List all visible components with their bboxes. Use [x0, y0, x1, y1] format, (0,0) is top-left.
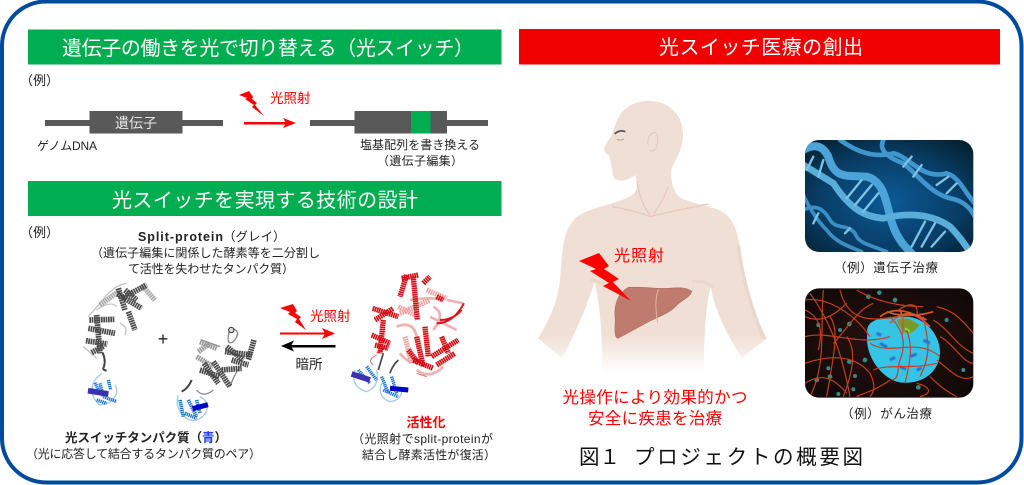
icon: light arrow top [239, 91, 310, 128]
text: activation description [352, 415, 496, 462]
diagram: genome DNA before: ゲノムDNA [37, 139, 97, 153]
protein: blue pair 1 [88, 374, 117, 405]
protein: blue pair in complex [352, 367, 408, 402]
diagram: genome DNA before: 遺伝子 [115, 115, 157, 131]
protein: blue pair 2 [177, 395, 208, 420]
text: activation description: 結合し酵素活性が復活） [362, 447, 496, 462]
caption: gene therapy: （例）遺伝子治療 [834, 260, 938, 275]
label: light irradiation on body: 光照射 [614, 247, 664, 265]
text: light switch protein description: （光に応答して結合するタンパク質のペア） [26, 446, 261, 461]
text: activation description: 活性化 [406, 415, 446, 430]
caption: cancer therapy: （例）がん治療 [841, 406, 932, 421]
heading: technology design [28, 181, 502, 216]
reversible arrows with light and dark labels: 光照射 [310, 309, 350, 324]
liver [615, 287, 692, 338]
reversible arrows with light and dark labels [280, 304, 350, 372]
example label 1: （例） [20, 73, 59, 88]
protein: gray fragment 1 [83, 283, 155, 371]
text: light switch protein description [26, 430, 261, 461]
text: activation description: （光照射でsplit-proteinが [352, 431, 493, 446]
protein: active red complex [371, 275, 464, 377]
text: treatment message [562, 388, 748, 428]
text: treatment message: 光操作により効果的かつ [562, 388, 748, 407]
heading: gene switch: 遺伝子の働きを光で切り替える（光スイッチ） [62, 37, 474, 60]
heading: gene switch [28, 30, 502, 64]
text: split-protein description: （遺伝子編集に関係した酵素等を二分割し [91, 245, 320, 260]
diagram: genome DNA edited [310, 111, 488, 168]
diagram: genome DNA before [37, 111, 223, 153]
body silhouette [538, 101, 767, 373]
text: split-protein description [91, 230, 320, 276]
icon: light arrow top: 光照射 [270, 91, 310, 106]
figure caption: プロジェクトの概要図 [634, 446, 863, 469]
text: split-protein description: Split-protein [138, 230, 223, 244]
text: treatment message: 安全に疾患を治療 [588, 409, 722, 428]
figure caption: 図１ [579, 446, 620, 469]
face details [615, 131, 658, 151]
text: split-protein description: て活性を失わせたタンパク質） [128, 261, 294, 276]
heading: technology design: 光スイッチを実現する技術の設計 [112, 189, 418, 212]
heading: light switch medicine: 光スイッチ医療の創出 [659, 36, 863, 59]
photo: cancer cell [805, 288, 973, 398]
icon: large lightning bolt on liver [579, 253, 631, 301]
liver ligament [656, 289, 659, 323]
text: split-protein description: （グレイ） [223, 230, 286, 244]
illustration: human torso with liver [538, 101, 767, 373]
heading: light switch medicine [519, 29, 1000, 64]
plus sign: + [158, 329, 168, 349]
reversible arrows with light and dark labels: 暗所 [296, 357, 323, 372]
example label 2: （例） [20, 225, 59, 240]
text: light switch protein description: 光スイッチタンパク質（青） [65, 430, 227, 445]
diagram: genome DNA edited: （遺伝子編集） [377, 153, 463, 168]
diagram: genome DNA edited: 塩基配列を書き換える [360, 137, 480, 152]
protein: gray fragment 2 [182, 327, 254, 394]
photo: DNA helix [803, 140, 977, 253]
